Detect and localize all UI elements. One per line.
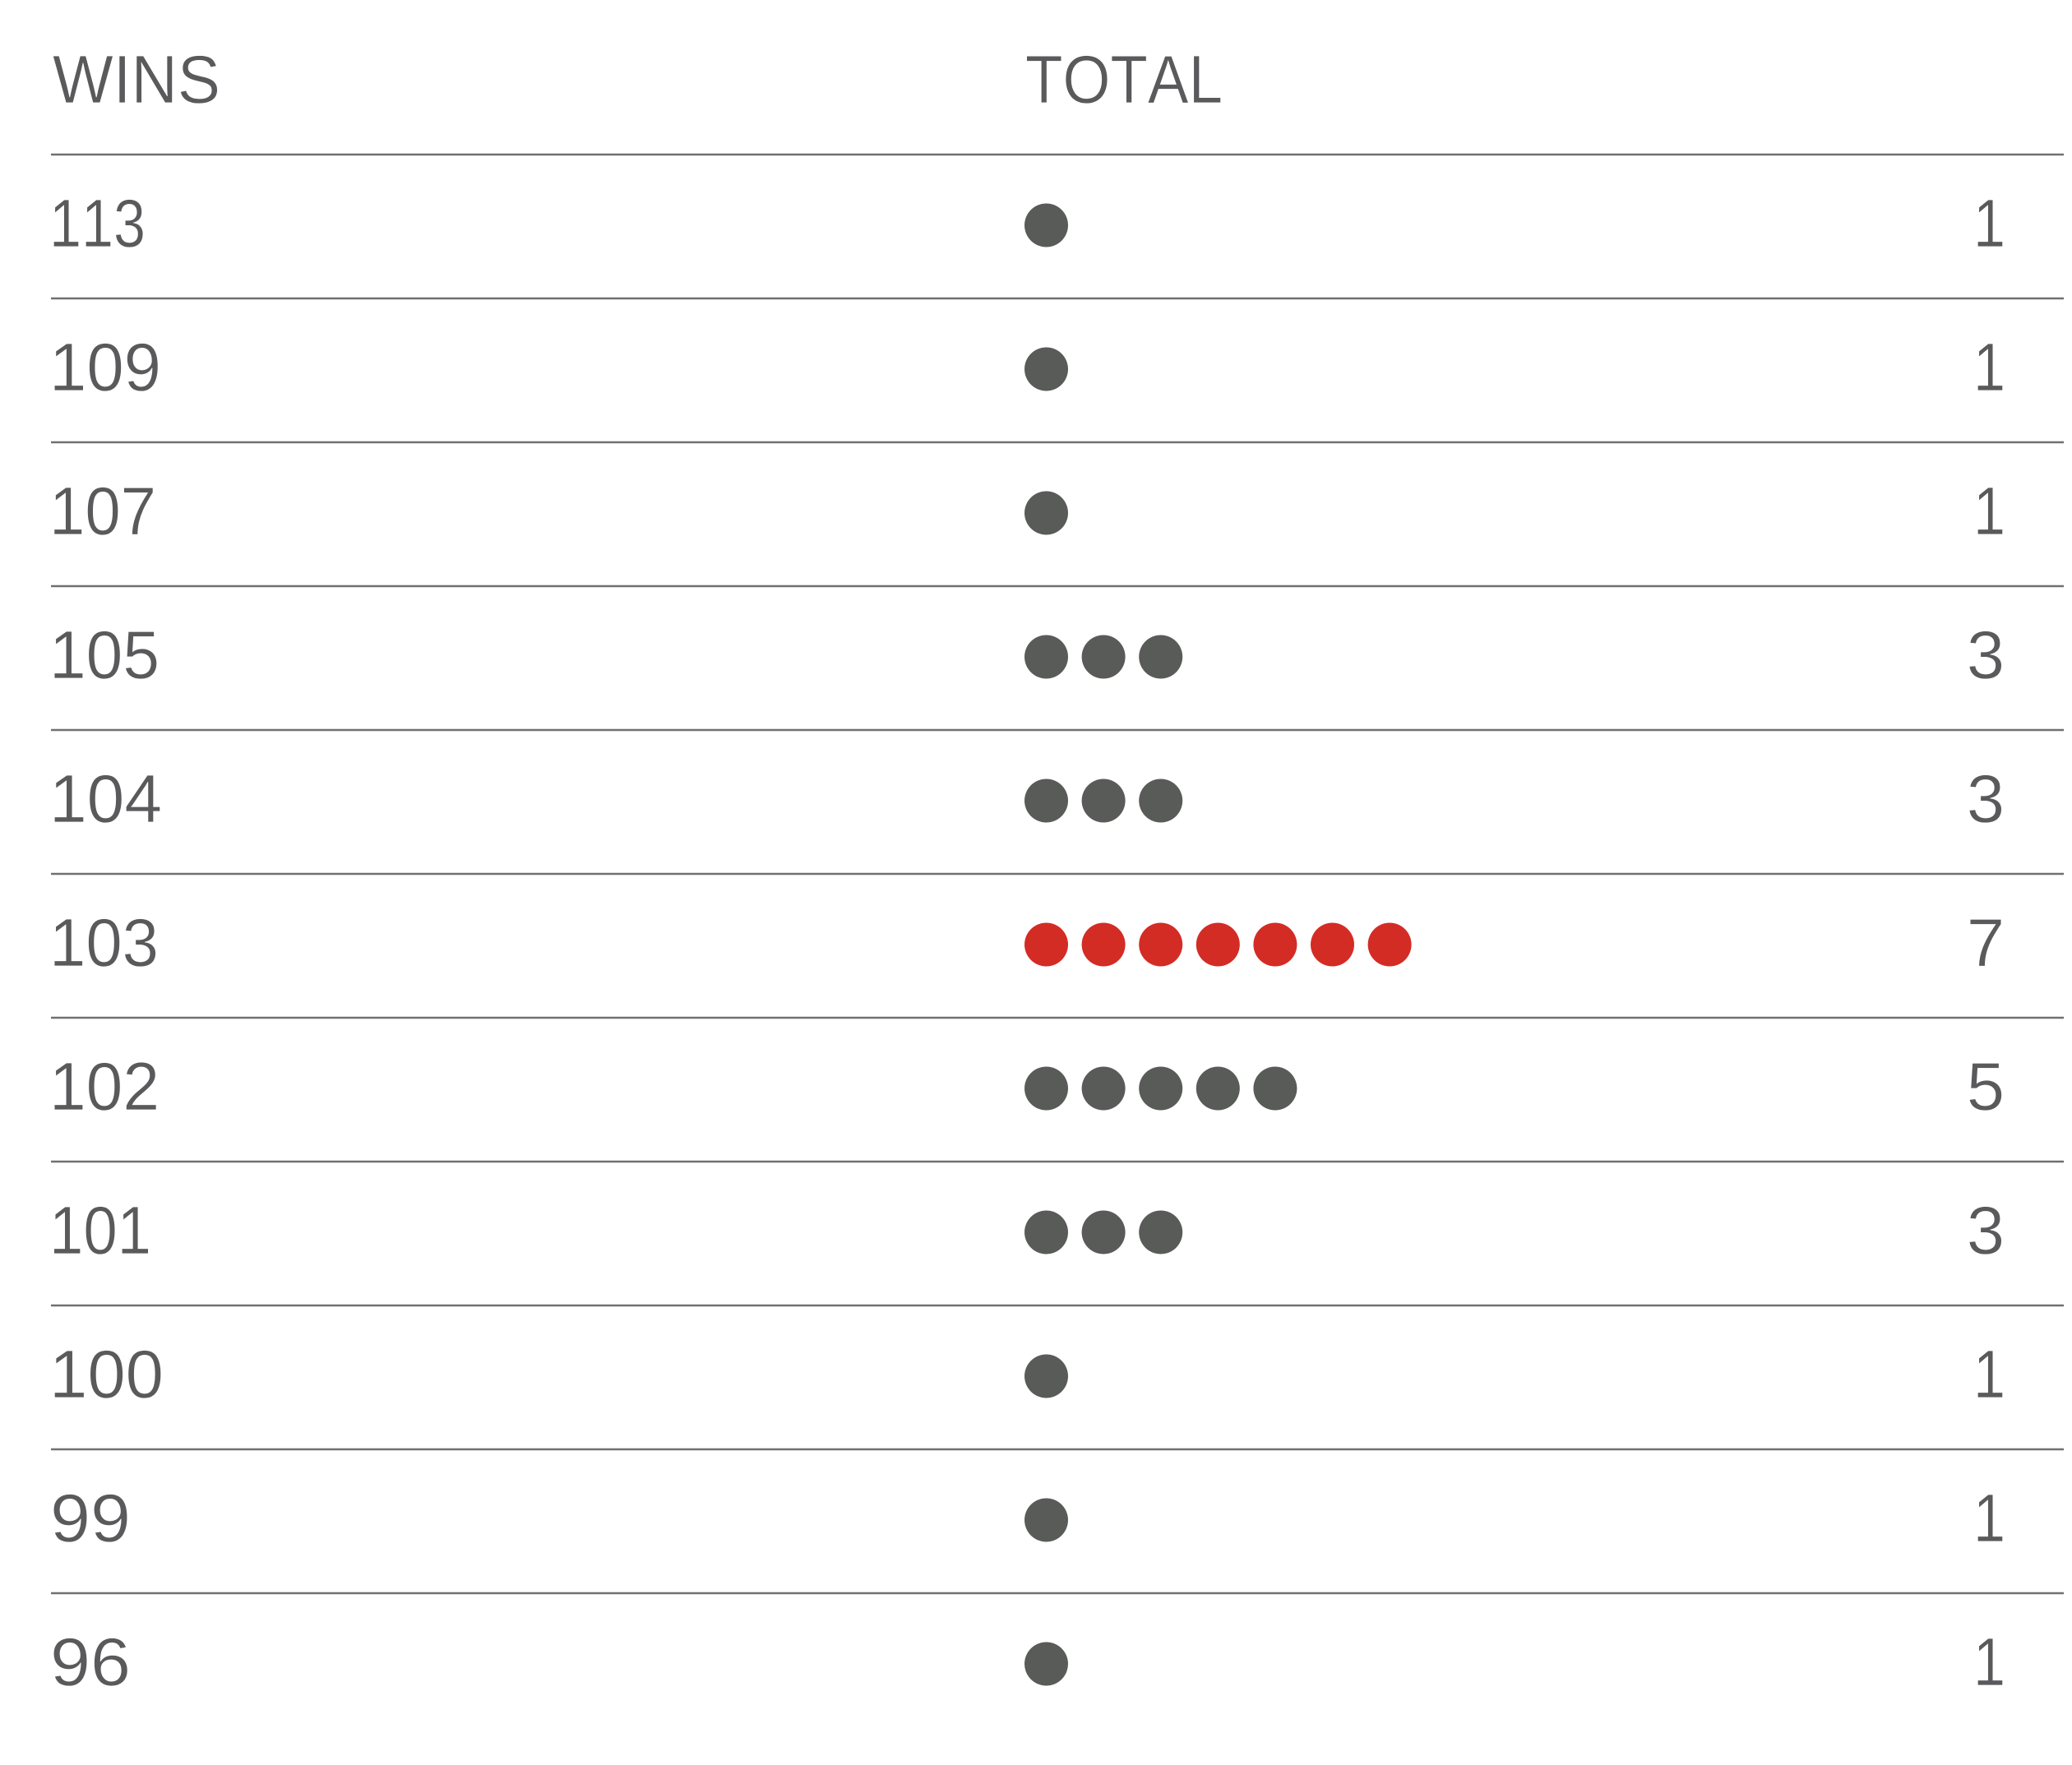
row: 102 wins: 102 xyxy=(49,1048,160,1125)
row: 107 wins: 1 xyxy=(1973,473,2005,549)
row: 113 wins xyxy=(49,185,2005,261)
column heading: wins: WINS xyxy=(53,41,220,118)
row: 100 wins: 100 xyxy=(49,1336,164,1412)
row: 109 wins: 1 xyxy=(1973,329,2005,405)
row: 113 wins: 1 xyxy=(1973,185,2005,261)
row: 100 wins: 1 xyxy=(1973,1336,2005,1412)
row: 104 wins xyxy=(49,760,2005,837)
row: 101 wins xyxy=(49,1192,2005,1268)
row: 102 wins: 5 xyxy=(1967,1048,2005,1125)
row: 96 wins: 96 xyxy=(50,1624,131,1700)
row: 105 wins: 3 xyxy=(1967,617,2005,693)
row: 96 wins xyxy=(50,1624,2005,1700)
row: 113 wins: 113 xyxy=(49,185,146,261)
row: 102 wins xyxy=(49,1048,2005,1125)
row: 105 wins xyxy=(49,617,2005,693)
row: 96 wins: 1 xyxy=(1973,1624,2005,1700)
row: 99 wins: 99 xyxy=(50,1480,131,1556)
column heading: total: TOTAL xyxy=(1025,41,1223,118)
row: 103 wins, highlighted: 7 xyxy=(1967,904,2005,981)
row: 103 wins, highlighted xyxy=(49,904,2005,981)
row: 101 wins: 101 xyxy=(49,1192,151,1268)
row: 109 wins: 109 xyxy=(49,329,161,405)
row: 99 wins xyxy=(50,1480,2005,1556)
row: 105 wins: 105 xyxy=(49,617,160,693)
row: 109 wins xyxy=(49,329,2005,405)
row: 99 wins: 1 xyxy=(1973,1480,2005,1556)
row: 107 wins: 107 xyxy=(49,473,156,549)
row: 107 wins xyxy=(49,473,2005,549)
row: 101 wins: 3 xyxy=(1967,1192,2005,1268)
row: 100 wins xyxy=(49,1336,2005,1412)
row: 104 wins: 3 xyxy=(1967,760,2005,837)
row: 104 wins: 104 xyxy=(49,760,162,837)
row: 103 wins, highlighted: 103 xyxy=(49,904,159,981)
